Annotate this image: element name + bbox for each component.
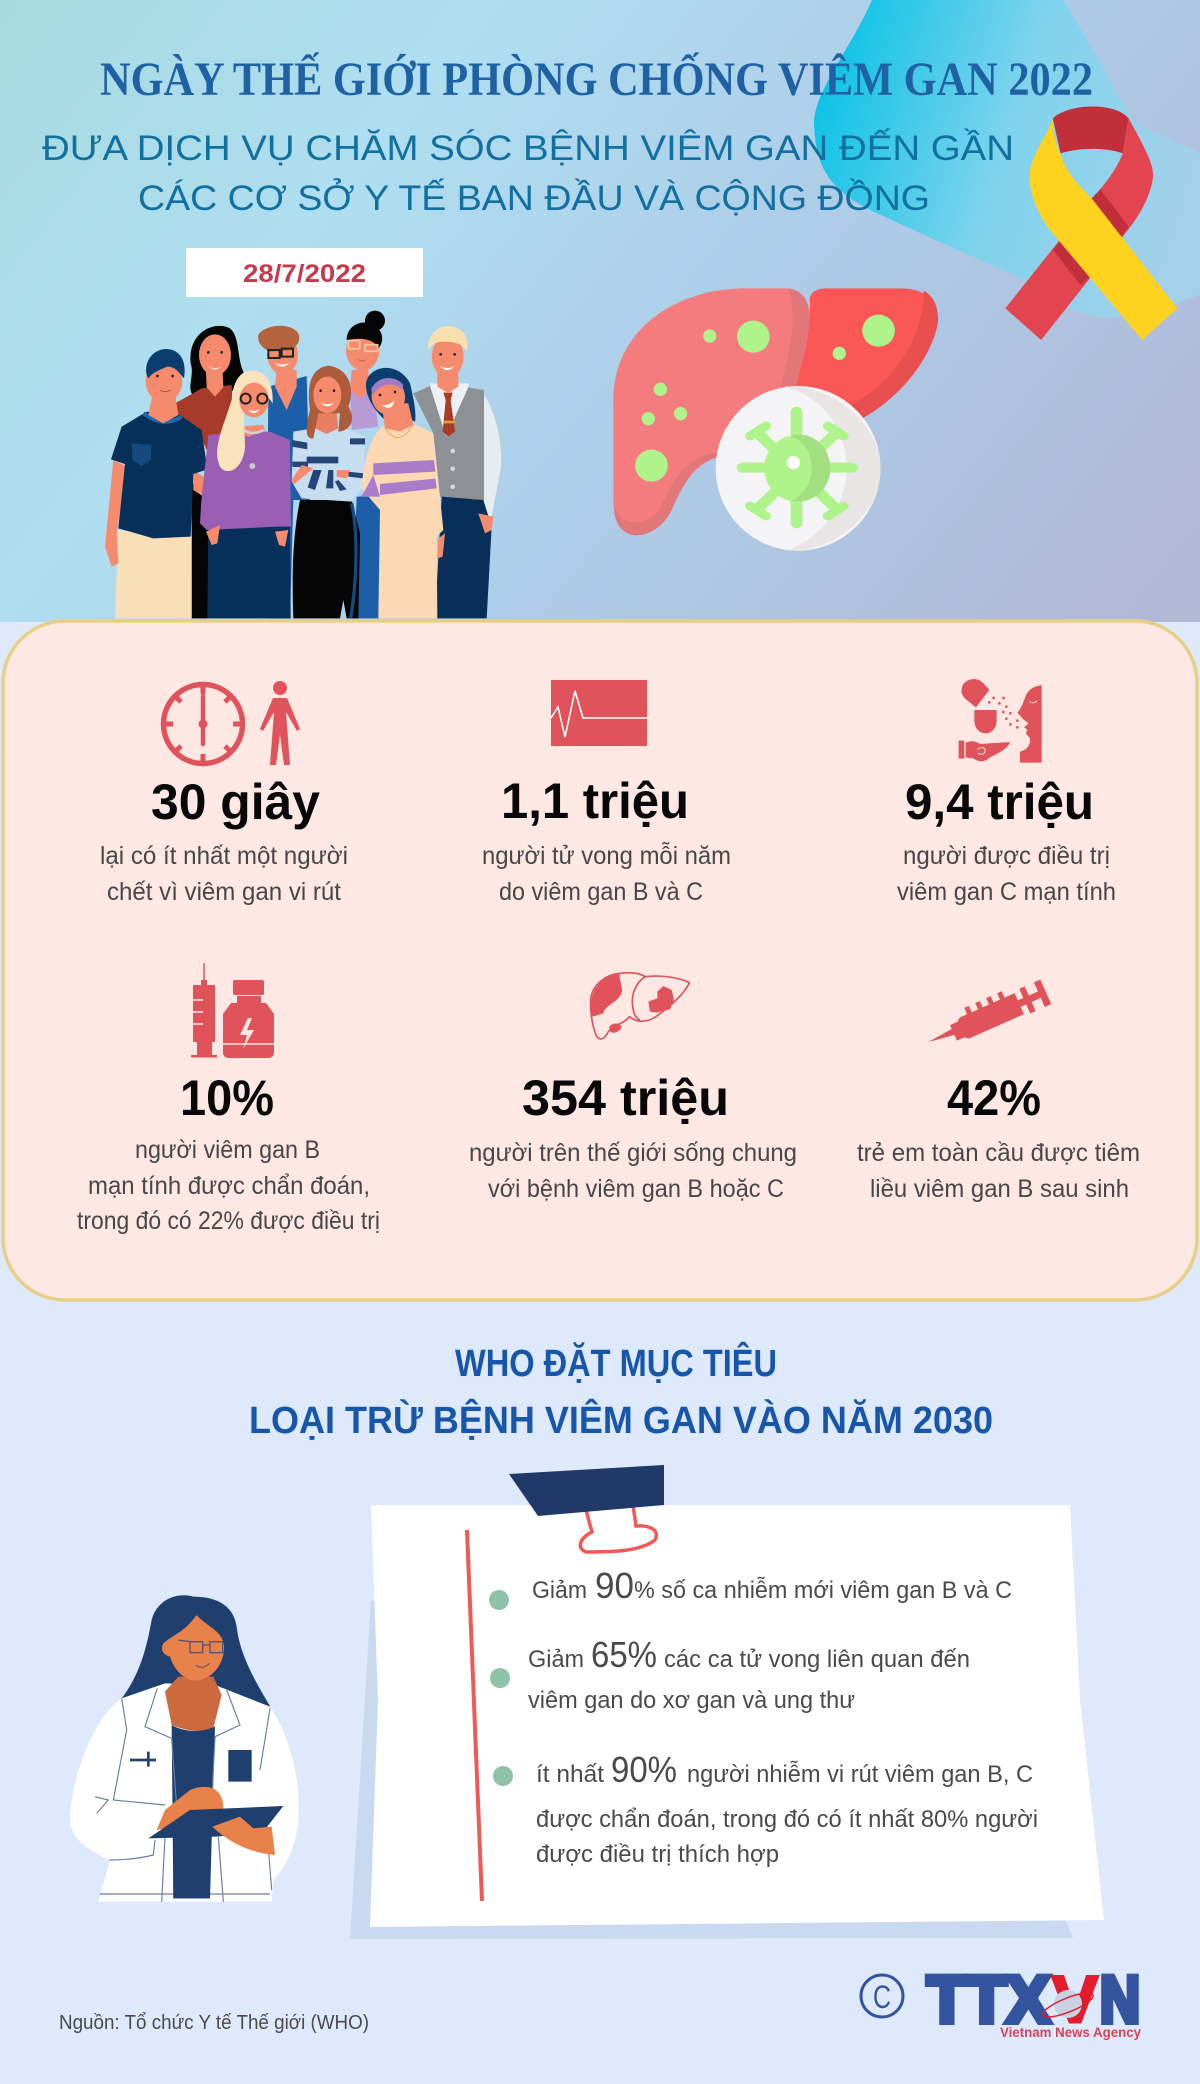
- icon: clock and person: [164, 681, 300, 765]
- goal 3: người nhiễm vi rút viêm gan B, C: [687, 1761, 1033, 1788]
- stat: 9.4 million treated: người được điều trị: [903, 842, 1110, 870]
- logo: TTXVN: N: [1100, 1962, 1140, 2036]
- goal 1: [489, 1565, 1012, 1610]
- stat: 1.1 million deaths: 1,1 triệu: [501, 773, 689, 829]
- stat: 10 percent diagnosed: mạn tính được chẩn đoán,: [88, 1172, 370, 1200]
- subtitle: [42, 128, 1014, 218]
- logo: TTXVN: TTX: [927, 1962, 1050, 2036]
- stat: 9.4 million treated: [897, 774, 1116, 906]
- stat: 30 seconds: lại có ít nhất một người: [100, 842, 348, 870]
- stat: 354 million living with hepatitis: 354 triệu: [522, 1070, 729, 1126]
- stat: 42 percent vaccinated: [857, 1070, 1140, 1203]
- goal 3: được điều trị thích hợp: [536, 1841, 779, 1868]
- stat: 42 percent vaccinated: 42%: [947, 1070, 1041, 1126]
- stat: 10 percent diagnosed: [77, 1070, 380, 1235]
- logo: TTXVN: [861, 1962, 1141, 2040]
- icon: syringe and vial: [191, 963, 274, 1058]
- goal 1: % số ca nhiễm mới viêm gan B và C: [634, 1577, 1012, 1604]
- stat: 9.4 million treated: 9,4 triệu: [905, 774, 1094, 830]
- stat: 42 percent vaccinated: liều viêm gan B sau sinh: [870, 1175, 1129, 1203]
- heading: WHO target: LOẠI TRỪ BỆNH VIÊM GAN VÀO NĂM 2030: [249, 1398, 993, 1442]
- stat: 1.1 million deaths: [482, 773, 731, 906]
- goal 2: [490, 1634, 970, 1714]
- stat: 354 million living with hepatitis: [469, 1070, 797, 1203]
- margin line: [467, 1530, 482, 1901]
- stat: 9.4 million treated: viêm gan C mạn tính: [897, 878, 1116, 906]
- stat: 10 percent diagnosed: 10%: [180, 1070, 274, 1126]
- stat: 354 million living with hepatitis: người trên thế giới sống chung: [469, 1139, 797, 1167]
- stat: 354 million living with hepatitis: với bệnh viêm gan B hoặc C: [488, 1175, 784, 1203]
- stat: 30 seconds: [100, 774, 348, 906]
- icon: hepatitis ribbon: [1005, 106, 1177, 340]
- panel: global hepatitis statistics: [3, 621, 1197, 1300]
- logo: TTXVN: C: [873, 1979, 891, 2015]
- goal 3: 90%: [611, 1749, 677, 1790]
- goal 3: ít nhất: [536, 1761, 604, 1788]
- heading: WHO target: [249, 1341, 993, 1442]
- goal 2: 65%: [591, 1634, 657, 1675]
- logo: TTXVN: V: [1052, 1962, 1098, 2036]
- heading: WHO target: WHO ĐẶT MỤC TIÊU: [455, 1341, 777, 1385]
- stat: 10 percent diagnosed: người viêm gan B: [135, 1136, 320, 1164]
- source note: Nguồn: Tổ chức Y tế Thế giới (WHO): [59, 2012, 369, 2034]
- subtitle: ĐƯA DỊCH VỤ CHĂM SÓC BỆNH VIÊM GAN ĐẾN GẦN: [42, 128, 1014, 168]
- goal 3: [493, 1749, 1038, 1868]
- logo: TTXVN: Vietnam News Agency: [1000, 2024, 1141, 2040]
- illustration: liver with virus: [613, 288, 938, 551]
- stat: 1.1 million deaths: người tử vong mỗi năm: [482, 841, 731, 870]
- stat: 30 seconds: chết vì viêm gan vi rút: [107, 878, 341, 906]
- stat: 42 percent vaccinated: trẻ em toàn cầu được tiêm: [857, 1139, 1140, 1167]
- subtitle: CÁC CƠ SỞ Y TẾ BAN ĐẦU VÀ CỘNG ĐỒNG: [138, 178, 930, 218]
- date badge: 28/7/2022: [243, 260, 366, 288]
- illustration: group of people: [105, 311, 501, 618]
- icon: heart monitor: [551, 680, 647, 746]
- illustration: doctor: [70, 1595, 299, 1902]
- panel: WHO goals note: [370, 1465, 1104, 1927]
- stat: 1.1 million deaths: do viêm gan B và C: [499, 878, 703, 906]
- goal 1: Giảm: [532, 1577, 587, 1604]
- goal 3: được chẩn đoán, trong đó có ít nhất 80% người: [536, 1806, 1038, 1833]
- icon: vaccine syringe: [921, 975, 1051, 1056]
- stat: 30 seconds: 30 giây: [151, 774, 320, 830]
- icon: paper clip: [509, 1465, 664, 1552]
- goal 2: các ca tử vong liên quan đến: [664, 1646, 970, 1673]
- icon: damaged liver: [591, 973, 689, 1039]
- header background: [0, 0, 1200, 622]
- title: NGÀY THẾ GIỚI PHÒNG CHỐNG VIÊM GAN 2022: [100, 51, 1093, 106]
- stat: 10 percent diagnosed: trong đó có 22% được điều trị: [77, 1207, 380, 1235]
- goal 2: viêm gan do xơ gan và ung thư: [528, 1687, 855, 1714]
- goal 2: Giảm: [528, 1646, 584, 1673]
- icon: medicine and face: [959, 679, 1042, 763]
- paper shadow: [350, 1600, 1073, 1939]
- decorative teal blob: [814, 0, 1200, 318]
- goal 1: 90: [595, 1565, 634, 1606]
- date badge: [186, 248, 423, 297]
